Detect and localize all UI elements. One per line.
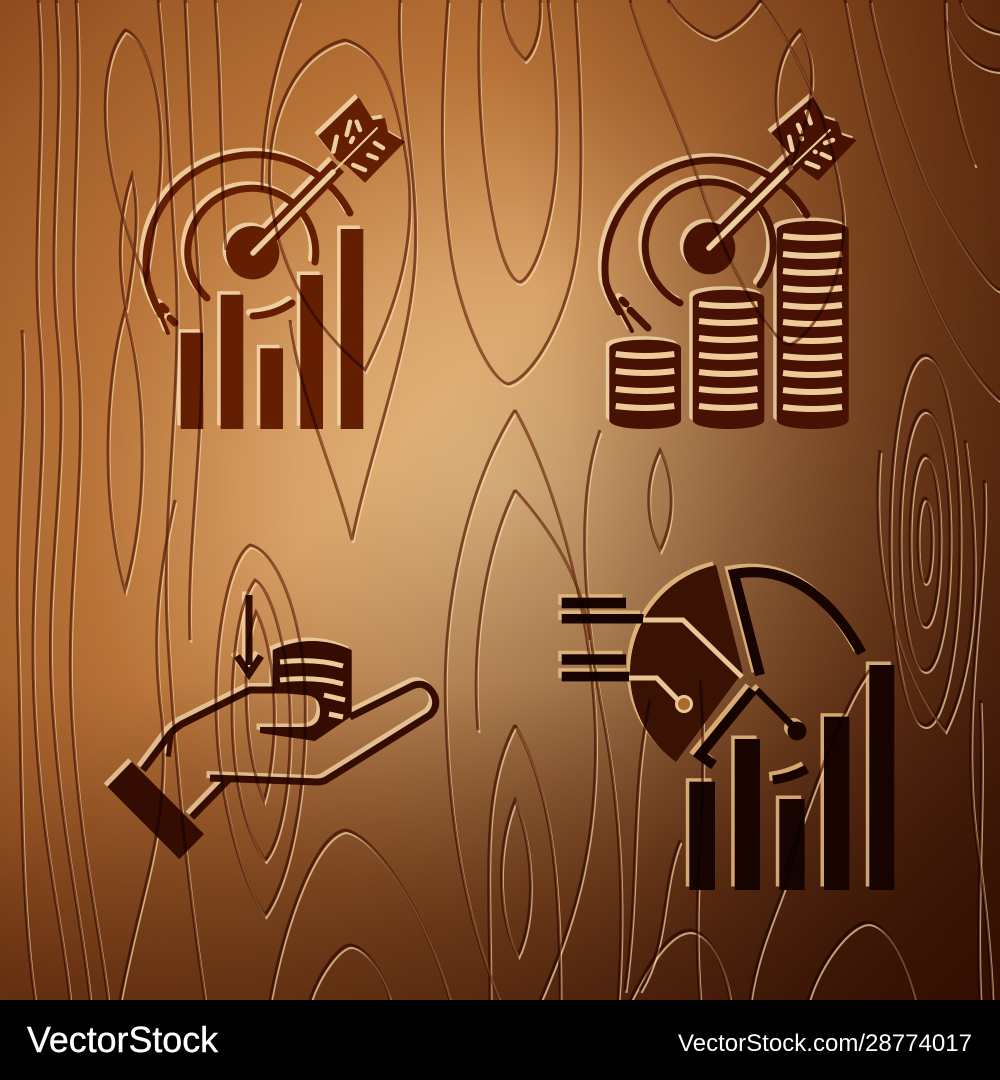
pie sector (630, 565, 743, 762)
icon: pie chart, shield and bar chart (558, 562, 894, 890)
icon: target with arrow and bar chart (143, 94, 405, 429)
coin stripes (616, 236, 842, 409)
footer logo: VectorStock (27, 1019, 219, 1060)
footer bar (0, 1000, 1000, 1080)
icon: hand holding coins with down arrow (104, 592, 436, 859)
footer image id: VectorStock.com/28774017 (678, 1030, 972, 1057)
coin stripes (280, 661, 345, 717)
icon: target with arrow and coin stacks (601, 93, 857, 429)
